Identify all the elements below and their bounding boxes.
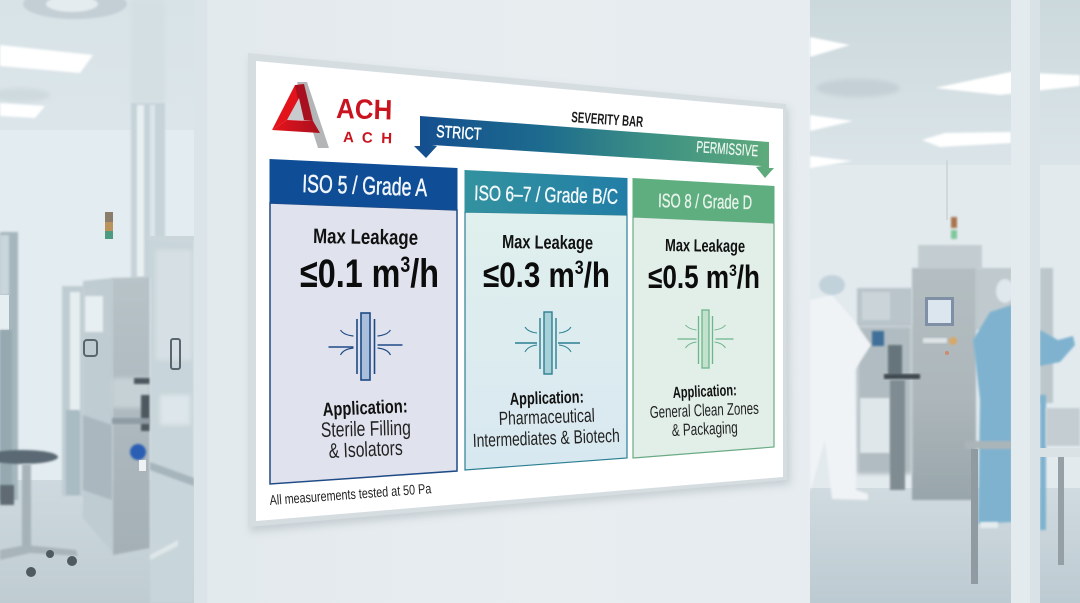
application text: Pharmaceutical bbox=[498, 406, 595, 430]
strict label: STRICT bbox=[436, 122, 482, 144]
poster frame bbox=[248, 53, 787, 527]
heading: ISO 5 / Grade A bbox=[302, 170, 428, 202]
poster white surface bbox=[256, 61, 783, 521]
value: 3 bbox=[729, 261, 737, 280]
max leakage label: Max Leakage bbox=[665, 235, 745, 256]
panel: ISO 6-7 bbox=[464, 170, 628, 470]
value: /h bbox=[584, 256, 610, 295]
poster shadow bbox=[250, 58, 790, 532]
icon: logo triangle bbox=[272, 82, 329, 148]
card header bbox=[632, 178, 774, 223]
right glass machine bbox=[150, 240, 194, 603]
value: ≤0.5 m bbox=[648, 259, 747, 295]
application text: Application: bbox=[672, 382, 737, 402]
application text bbox=[649, 382, 759, 440]
table bbox=[965, 441, 1012, 449]
application text: General Clean Zones bbox=[649, 399, 759, 422]
panel: ISO 5 bbox=[270, 159, 458, 484]
value: ≤0.3 m bbox=[483, 256, 592, 295]
person white bbox=[810, 295, 871, 500]
logo wordmark: ACH bbox=[336, 93, 393, 125]
application text: Application: bbox=[322, 396, 408, 421]
footnote: All measurements tested at 50 Pa bbox=[269, 480, 432, 508]
card header bbox=[464, 170, 628, 215]
value: /h bbox=[737, 259, 760, 295]
value: /h bbox=[410, 252, 439, 296]
person blue bbox=[973, 305, 1012, 524]
left window scene bbox=[0, 0, 196, 603]
card header bbox=[270, 159, 458, 210]
icon: filter bbox=[515, 312, 580, 374]
card body bbox=[465, 212, 627, 470]
card body bbox=[633, 217, 774, 458]
ceiling vent bbox=[23, 0, 127, 19]
card body bbox=[270, 203, 457, 484]
glass door mullion bbox=[1011, 0, 1030, 603]
application text bbox=[472, 386, 620, 452]
ceiling lights bbox=[0, 45, 93, 73]
signal light bbox=[105, 212, 113, 222]
application text: & Isolators bbox=[328, 437, 403, 463]
application text: Sterile Filling bbox=[321, 417, 411, 442]
stool bbox=[0, 450, 58, 464]
right window scene bbox=[810, 0, 1080, 603]
signal light bbox=[951, 217, 957, 228]
value: 3 bbox=[400, 252, 410, 277]
application text: & Packaging bbox=[671, 418, 738, 440]
max leakage label: Max Leakage bbox=[313, 225, 418, 250]
left wall edge mullion bbox=[194, 0, 207, 603]
poster: severity infographic bbox=[256, 61, 783, 521]
heading: ISO 8 / Grade D bbox=[658, 190, 752, 214]
arrow: gradient severity arrow bbox=[414, 116, 774, 178]
machine steel panel bbox=[112, 277, 150, 555]
severity bar bbox=[414, 109, 774, 178]
back frame bbox=[62, 286, 84, 496]
application text: Intermediates & Biotech bbox=[472, 426, 620, 452]
severity bar label: SEVERITY BAR bbox=[571, 109, 644, 131]
value: ≤0.1 m bbox=[300, 252, 424, 296]
machine glass front bbox=[83, 278, 113, 553]
application text bbox=[321, 396, 411, 463]
icon: filter bbox=[678, 310, 734, 368]
icon: filter bbox=[328, 313, 402, 380]
logo: ACH bbox=[272, 82, 393, 148]
ceiling lights bbox=[810, 37, 850, 57]
application text: Application: bbox=[509, 386, 584, 409]
column bbox=[131, 0, 165, 103]
equipment behind door bbox=[1040, 268, 1053, 403]
max leakage label: Max Leakage bbox=[502, 232, 593, 254]
permissive label: PERMISSIVE bbox=[696, 139, 759, 160]
machine bbox=[918, 245, 982, 269]
panel: ISO 8 bbox=[632, 178, 774, 458]
value: 3 bbox=[575, 258, 584, 279]
door bbox=[0, 232, 18, 500]
logo sub-wordmark: A C H bbox=[343, 129, 392, 147]
ceiling vent bbox=[816, 79, 900, 97]
heading: ISO 6–7 / Grade B/C bbox=[474, 182, 618, 209]
